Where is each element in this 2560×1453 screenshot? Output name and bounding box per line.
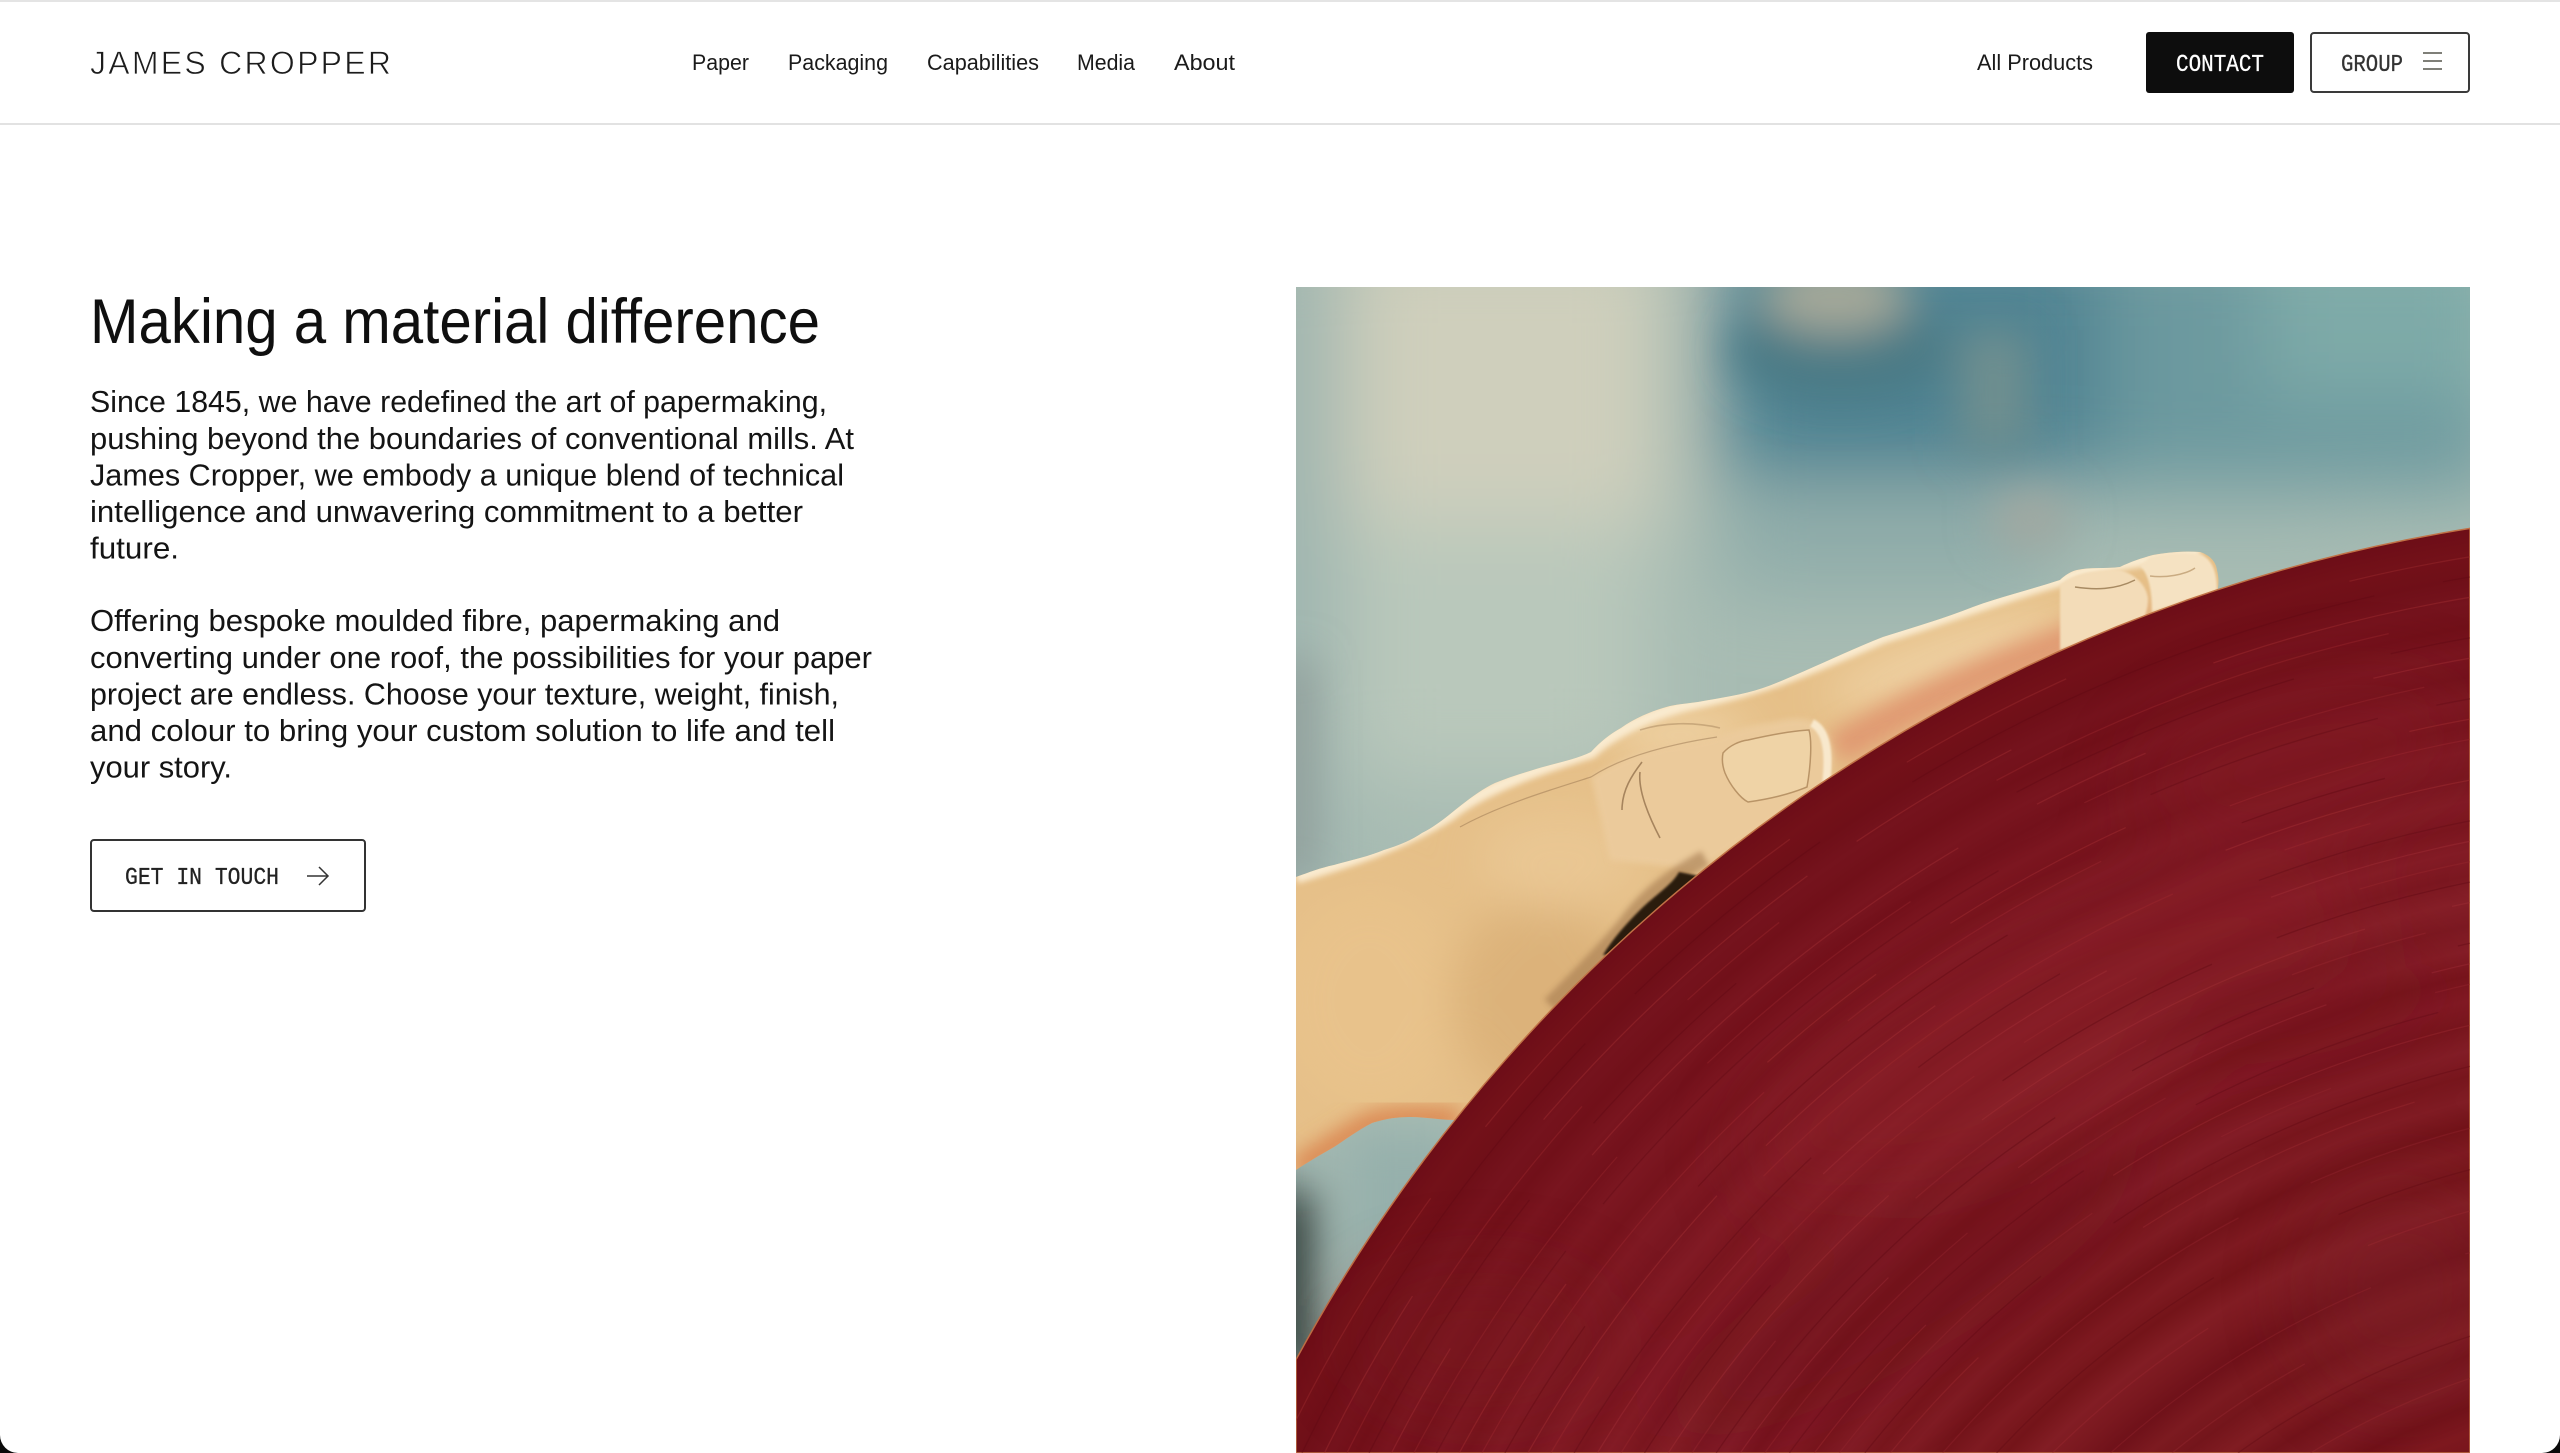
primary navigation links: Media [1077,50,1136,75]
intro paragraph one: James Cropper, we embody a unique blend of technical [90,458,844,492]
shadow under thumb [1603,872,1720,955]
contact button [2146,32,2294,93]
hand [1280,552,2218,1170]
intro paragraph one: future. [90,532,179,566]
red paper roll [1296,528,2500,1453]
logo wordmark: JAMES CROPPER [90,45,391,81]
intro paragraph two: Offering bespoke moulded fibre, papermaking and [90,604,780,638]
intro paragraph two: project are endless. Choose your texture, weight, finish, [90,678,839,712]
group button with menu icon: GROUP [2341,52,2403,79]
primary navigation links: Packaging [788,50,888,75]
hand top edge highlight [1296,552,2200,877]
photo background [1296,287,2470,1358]
icon: menu [2423,53,2442,69]
intro paragraph two: and colour to bring your custom solution to life and tell [90,714,835,748]
intro paragraph one [90,385,855,566]
intro paragraph two: your story. [90,750,232,784]
intro paragraph one: Since 1845, we have redefined the art of papermaking, [90,385,827,419]
intro paragraph one: pushing beyond the boundaries of conventional mills. At [90,422,855,456]
heading: Making a material difference [90,287,820,357]
primary navigation links: About [1174,50,1235,75]
all products link: All Products [1977,50,2093,75]
group button with menu icon [2311,33,2469,92]
header navigation bar [0,0,2560,125]
icon: arrow [307,867,328,885]
thumb tip highlight [1812,723,1827,785]
primary navigation links: Paper [692,50,749,75]
thumbnail [1722,730,1811,802]
photo: hand on red paper roll [1296,287,2470,1453]
paper roll shading [1350,656,2500,1453]
contact button: CONTACT [2176,52,2264,79]
thumb crease lines [1460,724,1720,838]
get in touch button: GET IN TOUCH [125,865,279,892]
hand shadow fringe [1550,858,1705,1005]
bottom window corners [0,1435,2560,1453]
get in touch button [91,840,365,911]
thumb [1591,719,1833,870]
intro paragraph two [90,604,872,784]
primary navigation links: Capabilities [927,50,1039,75]
primary navigation links [692,50,1235,75]
paper roll streaks [1296,557,2470,1453]
finger underside warm tone [1835,615,2145,750]
intro paragraph one: intelligence and unwavering commitment to a better [90,495,803,529]
fingertips [2060,553,2217,650]
bottom wrist warm edge [1296,1118,1460,1170]
intro paragraph two: converting under one roof, the possibilities for your paper [90,641,872,675]
